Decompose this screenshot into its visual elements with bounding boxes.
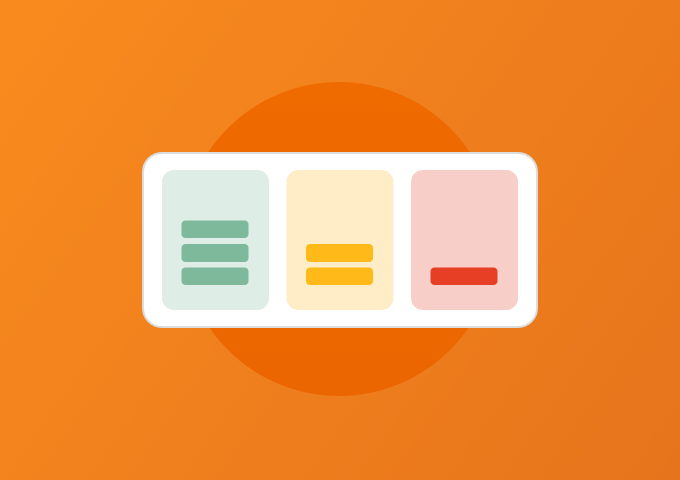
background circle [182, 82, 496, 396]
green bar top [182, 220, 248, 238]
red bar [430, 268, 498, 285]
yellow bar bottom [306, 268, 373, 285]
green bar bottom [182, 268, 248, 285]
green bar middle [182, 244, 248, 262]
panel: yellow level two bars [286, 170, 394, 310]
panel: red level one bar [411, 170, 518, 310]
yellow bar top [306, 244, 373, 262]
panel: green level three bars [162, 170, 269, 310]
white card [143, 153, 537, 327]
